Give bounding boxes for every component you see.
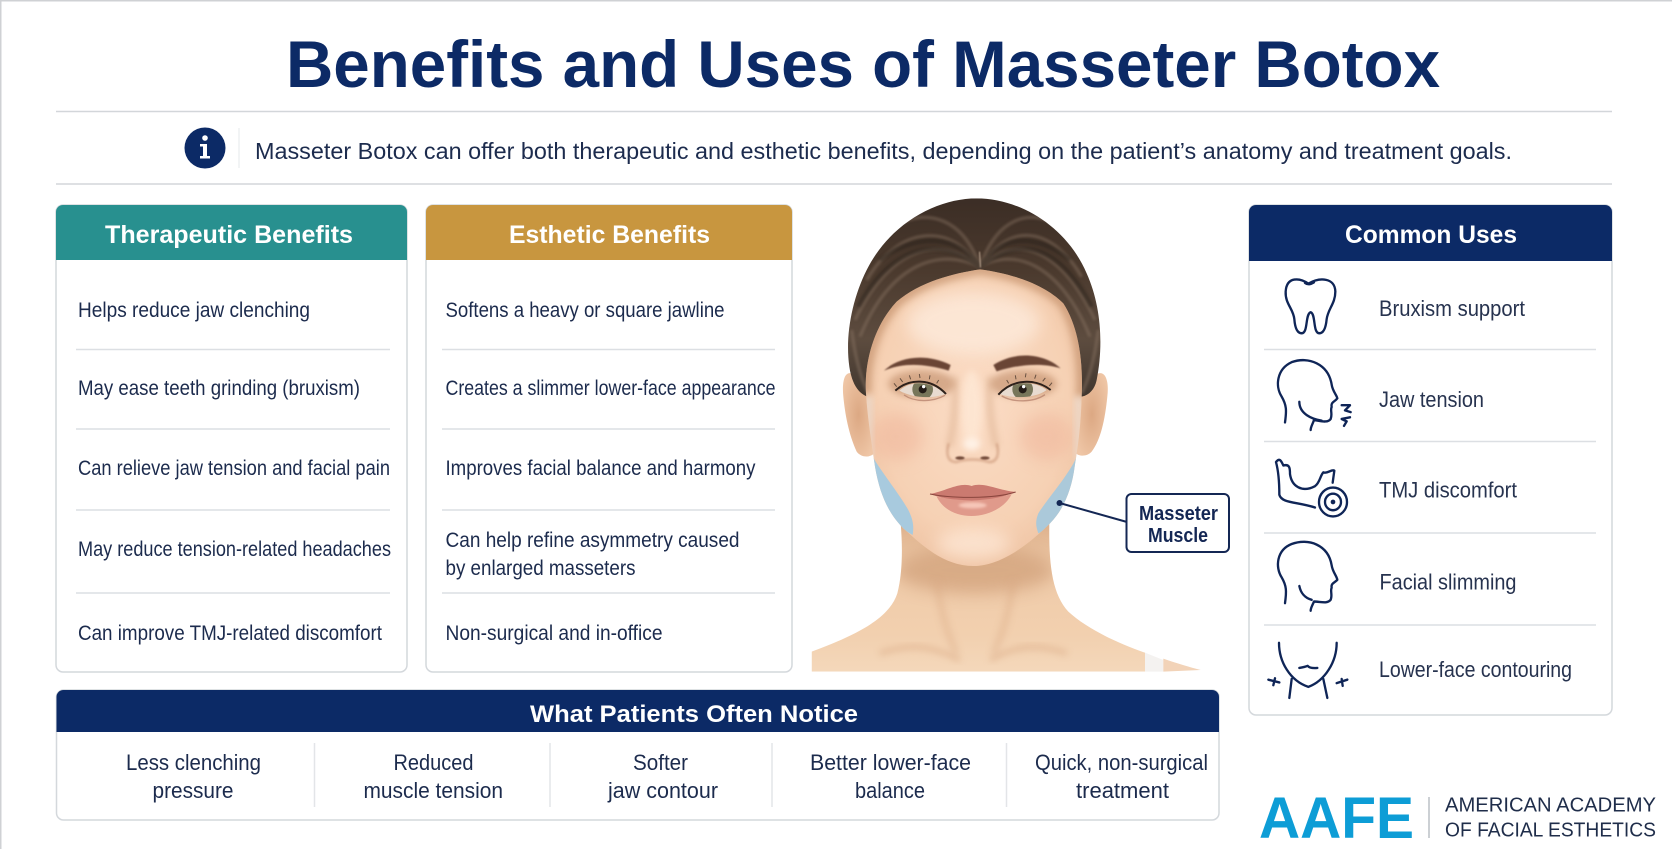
ears [843,373,874,457]
logo: AAFE [1259,786,1656,849]
intro text: Masseter Botox can offer both therapeutic and esthetic benefits, depending on the patient’s anatomy and treatment goals. [255,138,1512,164]
common uses list [1379,296,1572,682]
therapeutic header [56,205,407,260]
esthetic list: Creates a slimmer lower-face appearance [446,377,776,400]
notice items: Reduced [394,750,474,775]
common uses list: Facial slimming [1380,570,1516,594]
notice items: Quick, non-surgical [1035,750,1208,775]
notice items: balance [855,778,925,803]
therapeutic list: Helps reduce jaw clenching [78,299,310,322]
icon: facial slimming [1278,542,1337,611]
panel: common uses [1249,205,1612,715]
therapeutic list: May ease teeth grinding (bruxism) [78,377,360,400]
common uses list: TMJ discomfort [1379,478,1517,502]
right eye [998,373,1052,401]
left eye [894,374,946,401]
logo: AAFE: AMERICAN ACADEMY [1445,794,1656,816]
esthetic heading: Esthetic Benefits [509,221,710,249]
therapeutic list: May reduce tension-related headaches [78,538,391,561]
portrait: face illustration [810,197,1201,673]
common uses heading: Common Uses [1345,221,1517,249]
hair [843,197,1107,400]
esthetic list: Improves facial balance and harmony [446,457,756,480]
callout: masseter muscle: Masseter [1139,503,1218,525]
lips [930,485,1016,516]
common uses list: Lower-face contouring [1379,657,1572,682]
icon: tmj jaw [1276,460,1347,516]
therapeutic list: Can relieve jaw tension and facial pain [78,457,390,480]
therapeutic list [78,299,391,645]
panel: esthetic benefits [426,205,792,672]
panel: therapeutic benefits [56,205,407,672]
esthetic header [426,205,792,260]
logo: AAFE: OF FACIAL ESTHETICS [1445,820,1656,842]
notice items: Softer [633,750,688,775]
icon: jaw tension [1278,360,1351,430]
icon: lower-face contouring [1268,643,1347,698]
eye sockets [888,370,955,398]
esthetic list: Softens a heavy or square jawline [446,299,724,322]
panel: what patients often notice [56,690,1219,820]
esthetic list: Non-surgical and in-office [446,622,662,645]
notice items: pressure [152,778,234,803]
neck and shoulders [810,520,1147,673]
icon: info [184,128,226,168]
nose [947,439,998,462]
therapeutic heading: Therapeutic Benefits [105,221,353,249]
esthetic list [446,299,776,645]
notice items: jaw contour [607,778,718,803]
notice items: muscle tension [364,778,503,803]
esthetic list: by enlarged masseters [446,557,636,580]
face shape [866,269,1082,566]
notice items [126,750,1208,803]
notice items: Better lower-face [810,750,971,775]
callout: masseter muscle [1056,494,1229,552]
eyebrows [884,358,951,371]
notice header [56,690,1219,732]
common uses list: Bruxism support [1379,296,1525,321]
esthetic list: Can help refine asymmetry caused [446,529,740,552]
masseter highlight left [873,457,913,535]
callout: masseter muscle: Muscle [1148,525,1208,547]
title: Benefits and Uses of Masseter Botox [286,27,1440,101]
notice heading: What Patients Often Notice [530,701,858,728]
common uses list: Jaw tension [1379,387,1484,412]
notice items: Less clenching [126,750,261,775]
therapeutic list: Can improve TMJ-related discomfort [78,622,382,645]
masseter highlight right [1036,457,1077,533]
common uses header [1249,205,1612,261]
notice items: treatment [1076,778,1169,803]
icon: tooth [1286,279,1335,333]
